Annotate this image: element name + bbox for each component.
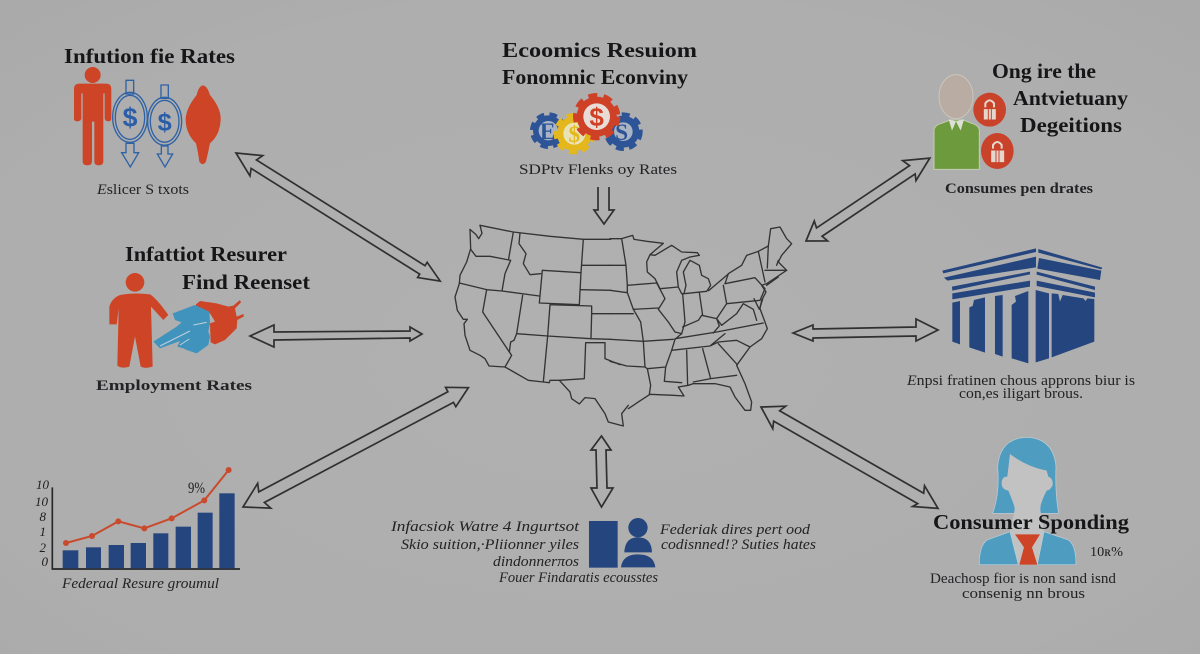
description line 1: Enpsi fratinen chous approns biur is xyxy=(906,373,1135,389)
icon: currency gears: E xyxy=(540,119,555,145)
panel: inflation rates xyxy=(64,44,235,198)
left text block: Infacsiok Watre 4 Ingurtsot xyxy=(390,519,580,535)
caption: rates: SDPtv Flenks oy Rates xyxy=(519,162,677,178)
heading: inflation rates: Infution fie Rates xyxy=(64,44,235,68)
right text block: Federiak dires pert ood xyxy=(659,522,811,538)
heading line 1: Ong ire the xyxy=(992,59,1096,83)
icon: red person with raised arm xyxy=(109,273,168,368)
icon: red drop shape xyxy=(186,85,221,164)
axis labels: 1 xyxy=(40,524,46,539)
icon: blue columned building xyxy=(942,248,1102,363)
caption: consumer rates: Consumes pen drates xyxy=(945,181,1093,197)
axis labels: 0 xyxy=(42,554,48,569)
icon: dollar coins with down arrows: $ xyxy=(123,103,138,133)
heading line 1: Infattiot Resurer xyxy=(125,242,287,266)
caption: employment rates: Employment Rates xyxy=(96,378,252,394)
icon: currency gears: $ xyxy=(589,102,604,132)
icon: dollar coins with down arrows xyxy=(113,80,182,167)
heading line 3: Degeitions xyxy=(1020,113,1122,137)
arrow: map to consumer spending xyxy=(755,396,944,520)
left text block: Skio suition,·Pliionner yiles xyxy=(401,537,579,553)
icon: currency gears: $ xyxy=(568,122,580,148)
axis labels: 2 xyxy=(40,540,46,555)
icon: red person xyxy=(74,67,111,165)
panel: bottom centre xyxy=(390,518,816,586)
axis labels: 10 xyxy=(36,477,50,492)
western states xyxy=(455,225,628,426)
axis labels xyxy=(35,477,50,569)
arrow: map to bank building xyxy=(793,319,938,341)
arrow: map to bottom centre xyxy=(591,436,613,507)
caption: inflation: Eslicer S txots xyxy=(96,182,189,198)
icon: currency gears: S xyxy=(615,120,628,146)
map of the United States xyxy=(455,225,792,426)
arrow: map to inflation rates xyxy=(230,143,447,291)
heading line 2: Antvietuany xyxy=(1013,86,1129,110)
left text block: dindonnerπos xyxy=(493,554,579,570)
arrow: map to consumer lending xyxy=(799,147,936,251)
arrow: map to federal reserve chart xyxy=(236,375,475,519)
value label: 10ʀ% xyxy=(1090,545,1123,560)
icon: blue rectangle and figure xyxy=(589,518,655,568)
heading line 2: Find Reenset xyxy=(182,270,310,294)
value label: 9%: 9% xyxy=(188,480,205,497)
subheading: economy: Fonomnic Econviny xyxy=(502,65,689,89)
arrow: down to map xyxy=(594,187,614,224)
icon: currency gears xyxy=(532,95,641,152)
panel: consumer spending xyxy=(930,437,1130,602)
panel: federal reserve chart xyxy=(35,467,240,592)
heading: consumer spending: Consumer Sponding xyxy=(933,510,1130,534)
description line 2: consenig nn brous xyxy=(962,586,1085,602)
bottom caption: Fouer Findaratis ecousstes xyxy=(498,570,658,586)
eastern states xyxy=(610,227,792,410)
panel: central bank building xyxy=(906,248,1135,402)
panel: consumer lending xyxy=(934,59,1129,197)
icon: dollar coins with down arrows: $ xyxy=(158,109,172,137)
left text block xyxy=(390,519,580,570)
heading: economics: Ecoomics Resuiom xyxy=(502,38,698,62)
icon: blue figure with tie xyxy=(979,437,1076,565)
axis labels: 8 xyxy=(40,509,46,524)
axis labels: 10 xyxy=(35,494,48,509)
icon: red padlock badges xyxy=(973,93,1014,169)
panel: employment rates xyxy=(96,242,310,394)
icon: person in green shirt xyxy=(934,75,979,169)
panel: economics xyxy=(502,38,698,224)
right text block: codisnned!? Suties hates xyxy=(661,537,816,553)
chart caption: Federaal Resure groumul xyxy=(61,576,219,592)
description line 1: Deachosp fior is non sand isnd xyxy=(930,571,1116,587)
arrow: map to employment rates xyxy=(250,325,422,347)
description line 2: con,es iligart brous. xyxy=(959,386,1083,402)
right text block xyxy=(659,522,816,553)
icon: blue hands and red plug xyxy=(153,300,244,353)
chart: bars and line xyxy=(52,467,240,569)
